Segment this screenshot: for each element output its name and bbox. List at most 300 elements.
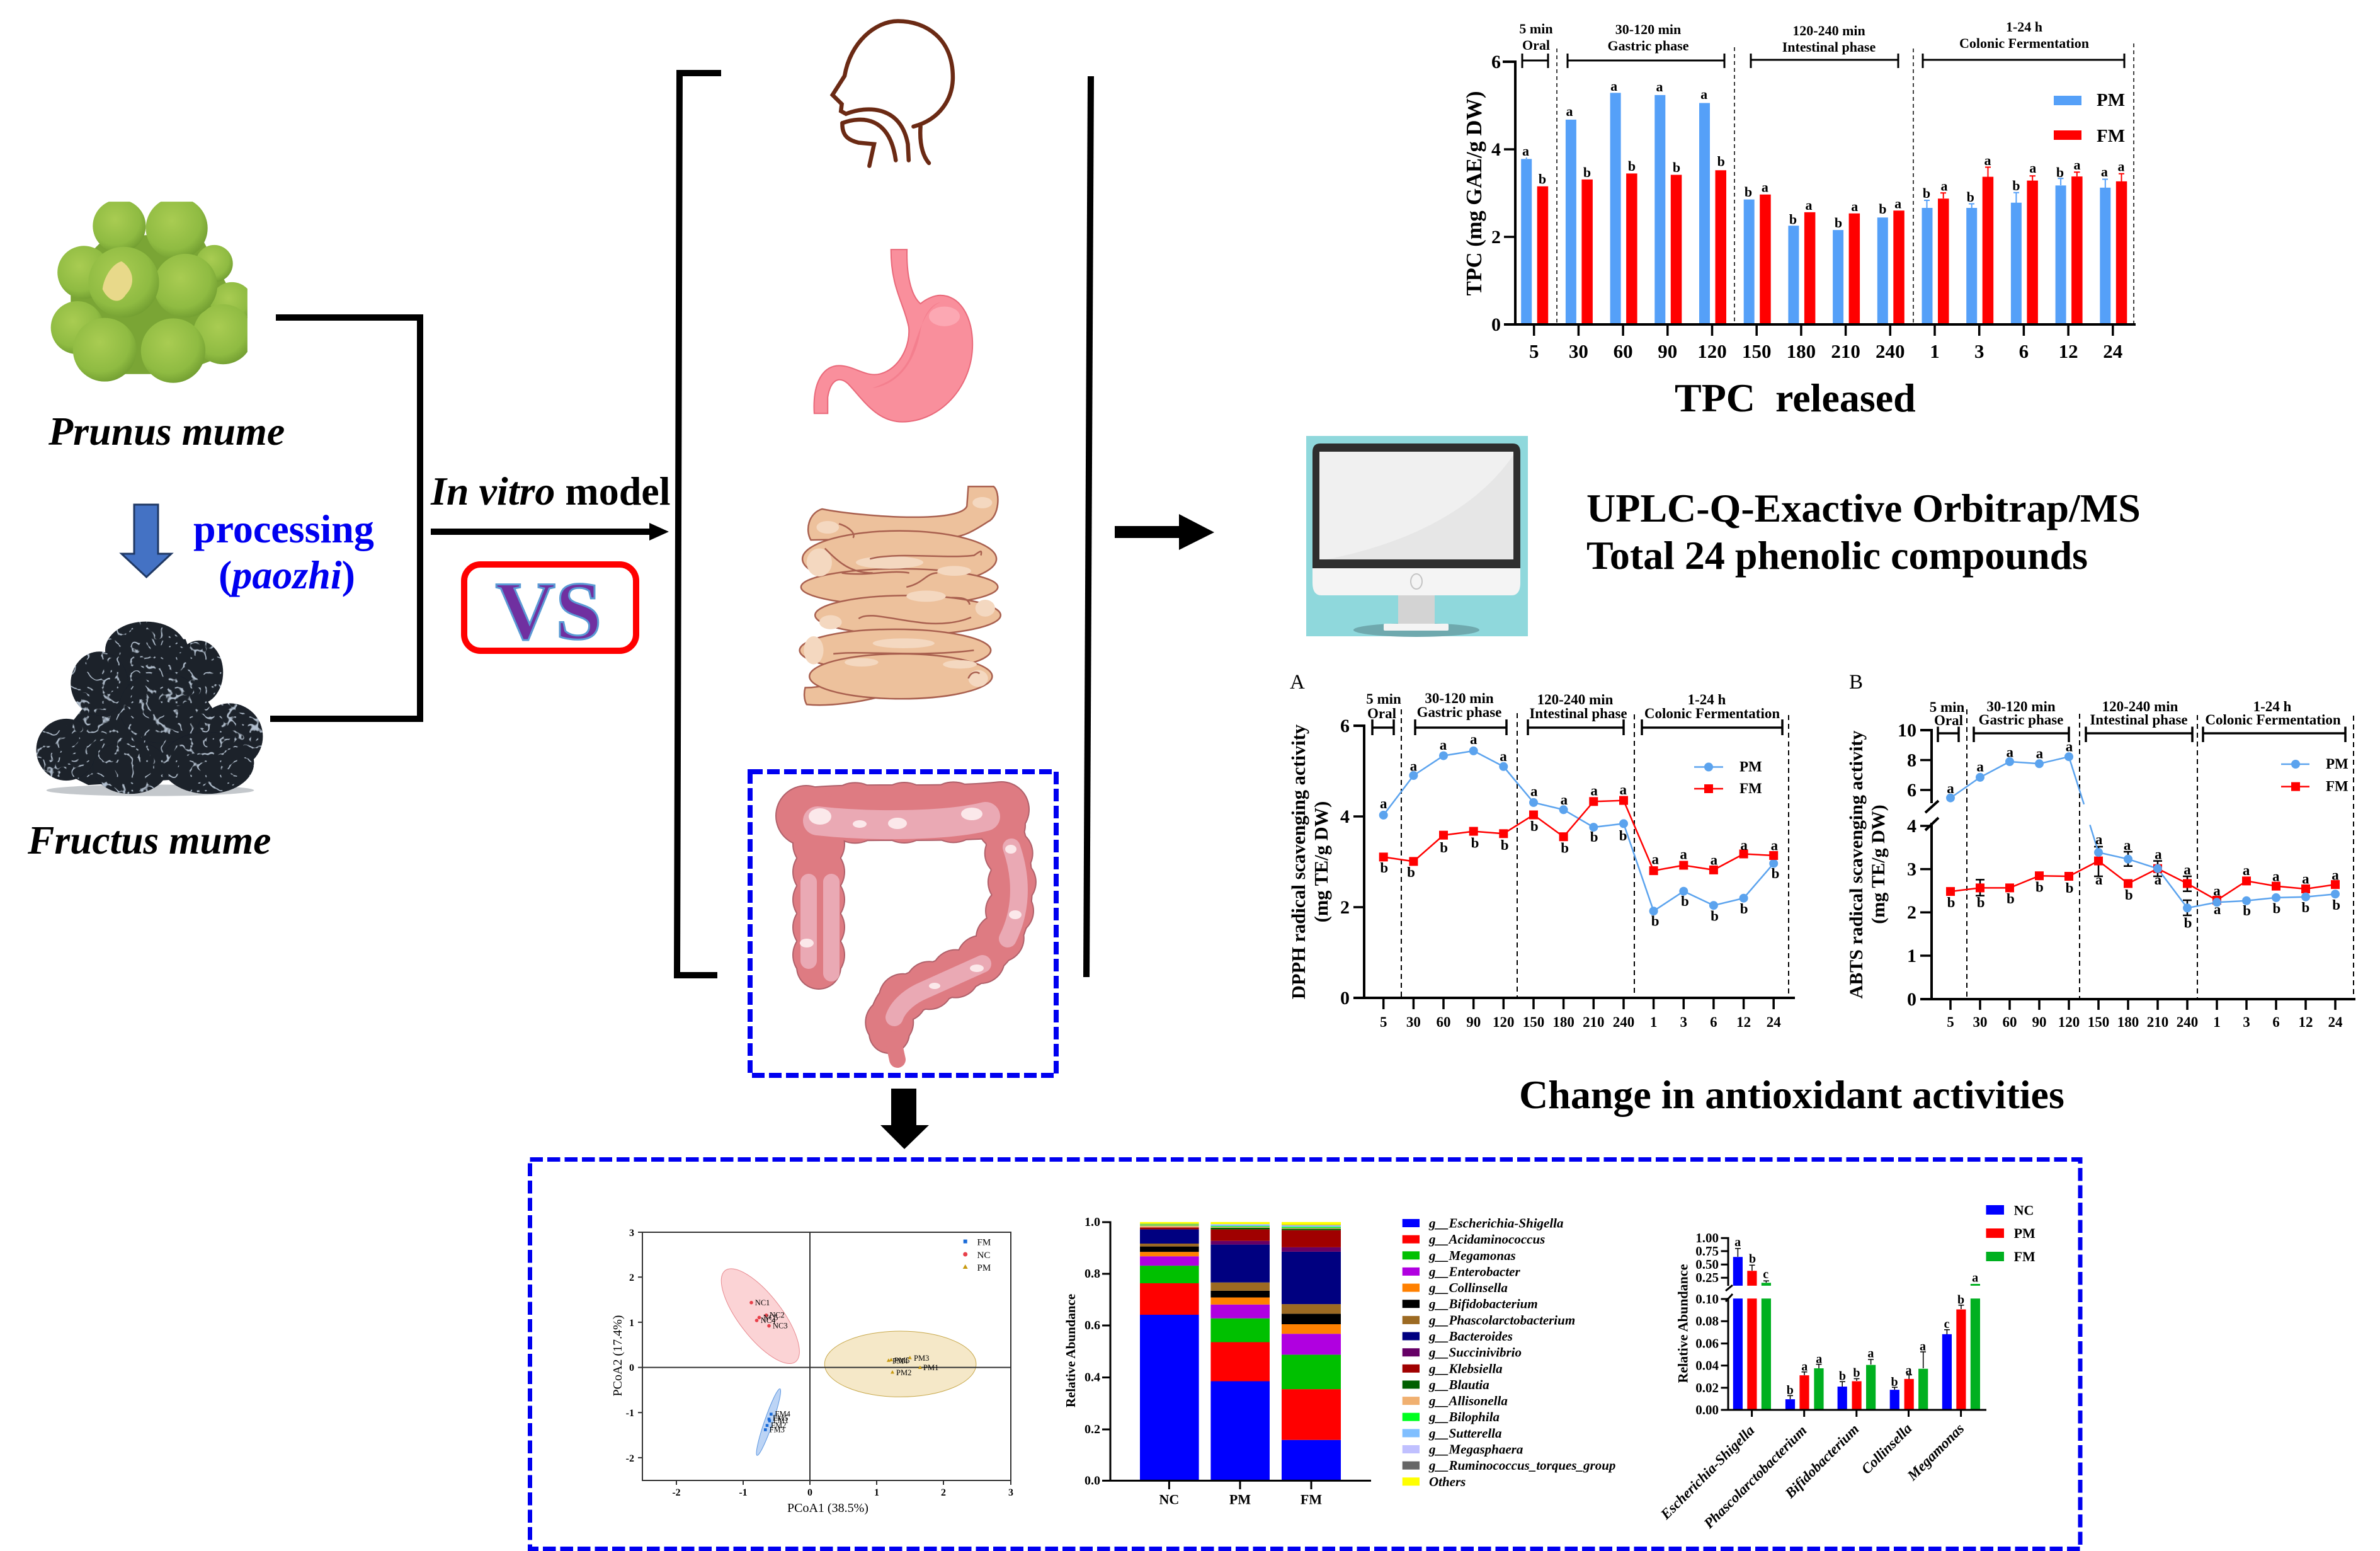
significance letters: b — [1772, 866, 1779, 881]
significance letters: a — [1500, 748, 1507, 764]
significance letters: a — [1619, 782, 1627, 798]
phase dividers — [1401, 709, 1789, 998]
points: FM: FM3 — [770, 1425, 785, 1434]
phase dividers — [1557, 43, 2134, 324]
x axis numbers: 1 — [1930, 340, 1940, 362]
significance letters: a — [1984, 152, 1991, 168]
significance letters: b — [1749, 1252, 1756, 1266]
y axis numbers — [1898, 720, 1916, 1010]
x axis numbers: 90 — [1466, 1014, 1481, 1030]
x axis numbers: 210 — [1831, 340, 1860, 362]
y axis numbers: 1.0 — [1085, 1215, 1100, 1229]
significance letters: a — [1410, 758, 1418, 774]
legend — [2054, 90, 2125, 146]
ellipse: NC group — [709, 1257, 812, 1375]
plot frame and axes — [638, 1232, 1011, 1485]
phase titles: Intestinal phase — [1782, 39, 1876, 55]
legend: PM — [1739, 758, 1762, 775]
icon: large intestine — [800, 808, 1022, 1060]
significance letters: b — [2007, 891, 2015, 907]
significance letters: b — [1745, 184, 1752, 200]
y axis numbers: 1.00 — [1695, 1230, 1719, 1245]
label: Prunus mume: Prunus mume — [48, 409, 285, 454]
points: NC: NC1 — [755, 1298, 770, 1307]
x axis numbers: 5 — [1380, 1014, 1387, 1030]
y axis numbers: 0.10 — [1695, 1291, 1719, 1307]
significance letters: a — [2272, 868, 2280, 884]
phase titles: 5 min — [1366, 691, 1401, 707]
phase brackets — [1522, 54, 2124, 68]
significance letters: a — [1566, 103, 1573, 119]
y axis numbers: 0 — [629, 1363, 634, 1373]
significance letters: a — [1700, 86, 1707, 102]
y axis numbers: 0.50 — [1695, 1257, 1719, 1272]
phase dividers — [1967, 709, 2354, 999]
legend — [2281, 756, 2349, 794]
rotated genus labels: Phascolarctobacterium — [1700, 1422, 1810, 1532]
points: PM — [887, 1354, 938, 1377]
significance letters: b — [1947, 895, 1955, 910]
x axis group names: NC — [1159, 1492, 1179, 1507]
y axis numbers: 0.75 — [1695, 1244, 1719, 1259]
significance letters: b — [1967, 189, 1974, 205]
significance letters: a — [1941, 178, 1947, 193]
chart: A DPPH line chart — [1288, 671, 1795, 1030]
x axis numbers: 6 — [2272, 1014, 2280, 1030]
legend: genera: g__Bilophila — [1428, 1409, 1500, 1424]
points: PM: PM4 — [892, 1357, 908, 1366]
y axis title: Relative Abundance — [1675, 1264, 1691, 1383]
significance letters: b — [2056, 164, 2064, 180]
significance letters: b — [1471, 835, 1479, 850]
points: FM: FM2 — [771, 1421, 786, 1430]
x axis numbers: 5 — [1947, 1014, 1954, 1030]
bars: FM — [1762, 1283, 1980, 1410]
phase titles: 120-240 min — [2102, 699, 2178, 714]
points: NC — [749, 1298, 788, 1331]
phase titles — [1930, 699, 2341, 728]
y axis numbers: 0.00 — [1695, 1402, 1719, 1417]
legend — [1694, 758, 1762, 796]
y axis numbers: 2 — [629, 1273, 634, 1283]
y axis numbers: 10 — [1898, 720, 1916, 741]
y axis title: PCoA2 (17.4%) — [611, 1315, 625, 1396]
significance letters: b — [2302, 900, 2309, 915]
legend: NC — [977, 1251, 990, 1261]
significance letters: b — [1590, 829, 1598, 845]
x axis numbers: 60 — [1614, 340, 1633, 362]
arrow: to results — [1115, 514, 1214, 550]
line: FM series — [1946, 857, 2340, 905]
significance letters: a — [2117, 159, 2125, 174]
chart: differential genera grouped bars — [1657, 1203, 2036, 1532]
legend: genera: g__Sutterella — [1428, 1426, 1502, 1441]
significance letters: b — [1380, 860, 1388, 876]
phase titles — [1519, 19, 2089, 55]
x axis numbers: 24 — [2103, 340, 2122, 362]
y axis title: TPC (mg GAE/g DW) — [1462, 91, 1486, 295]
phase titles: 1-24 h — [2006, 19, 2042, 35]
x axis numbers: 30 — [1973, 1014, 1988, 1030]
y axis numbers: 8 — [1907, 750, 1916, 771]
phase brackets — [1938, 727, 2345, 742]
label: Fructus mume: Fructus mume — [27, 818, 271, 862]
phase titles: Intestinal phase — [2090, 712, 2188, 728]
significance letters: b — [1530, 818, 1539, 834]
points: PM: PM1 — [923, 1363, 938, 1372]
significance letters: a — [2101, 164, 2108, 180]
callout box: colonic fermentation highlight — [750, 772, 1056, 1075]
x axis numbers: 2 — [941, 1487, 946, 1498]
y axis numbers — [1340, 716, 1350, 1009]
x axis numbers: 6 — [1710, 1014, 1717, 1030]
y axis numbers: 0.4 — [1085, 1371, 1100, 1385]
bars: PM series — [1521, 93, 2110, 324]
icon: stomach — [814, 249, 972, 422]
x axis numbers: 60 — [1436, 1014, 1451, 1030]
legend: FM — [977, 1237, 991, 1247]
points: PM: PM5 — [894, 1356, 909, 1365]
significance letters: a — [1440, 737, 1447, 753]
significance letters: b — [1787, 1383, 1794, 1397]
y axis numbers: 0.06 — [1695, 1336, 1719, 1351]
phase titles: Gastric phase — [1979, 712, 2063, 728]
points: NC: NC2 — [770, 1311, 785, 1320]
points: NC: NC4 — [761, 1316, 776, 1325]
y axis numbers: 1 — [629, 1318, 634, 1329]
legend: genera: g__Allisonella — [1428, 1394, 1508, 1409]
x axis numbers: 3 — [1974, 340, 1984, 362]
axes with break — [1721, 1238, 1986, 1410]
legend: genera: g__Phascolarctobacterium — [1428, 1312, 1575, 1327]
significance letters: a — [1530, 784, 1538, 799]
y axis title: DPPH radical scavenging activity — [1288, 724, 1309, 999]
phase titles: Colonic Fermentation — [1959, 35, 2089, 51]
points: FM — [764, 1410, 791, 1434]
icon: green Prunus mume fruit pile — [51, 197, 253, 383]
icon: black Fructus mume fruit pile — [37, 622, 263, 796]
significance letters: b — [2036, 879, 2044, 895]
y axis numbers: 6 — [1907, 780, 1916, 801]
x axis group names — [1159, 1492, 1322, 1507]
y axis title: ABTS radical scavenging activity — [1846, 731, 1867, 999]
significance letters: a — [1894, 195, 1901, 211]
chart: B ABTS line chart — [1846, 671, 2355, 1030]
significance letters: a — [1590, 782, 1598, 799]
significance letters: a — [1920, 1340, 1926, 1354]
x axis numbers: 120 — [2058, 1014, 2080, 1030]
phase titles: 30-120 min — [1615, 21, 1681, 37]
significance letters: b — [2125, 887, 2133, 903]
phase titles: Oral — [1367, 706, 1396, 721]
significance letters: b — [1673, 159, 1680, 175]
phase titles: Oral — [1934, 713, 1963, 728]
significance letters — [1947, 738, 2340, 931]
significance letters: b — [1561, 840, 1569, 856]
y axis numbers: 0.2 — [1085, 1422, 1100, 1436]
y axis numbers — [1695, 1230, 1719, 1417]
outer dark edge with haustra bumps — [806, 810, 1012, 1033]
panel: gut microbiota dashed box — [530, 1159, 2080, 1548]
legend: NC — [2014, 1203, 2034, 1218]
legend — [1986, 1203, 2036, 1264]
significance letters: a — [1470, 731, 1478, 747]
legend: FM — [2097, 126, 2125, 146]
significance letters: b — [2273, 900, 2280, 916]
significance letters: a — [1680, 847, 1687, 862]
significance letters: a — [1976, 758, 1984, 775]
x axis numbers: 90 — [2032, 1014, 2047, 1030]
y axis numbers: 0.08 — [1695, 1313, 1719, 1329]
highlights — [800, 808, 1022, 989]
phase titles — [1366, 690, 1780, 721]
significance letters: b — [1539, 171, 1546, 186]
phase titles: 30-120 min — [1986, 699, 2056, 714]
phase titles: 5 min — [1930, 699, 1965, 715]
x axis numbers: 210 — [1583, 1014, 1605, 1030]
y axis numbers: 6 — [1491, 52, 1501, 72]
y axis numbers: 2 — [1907, 902, 1916, 923]
significance letters: a — [1610, 78, 1617, 94]
points: PM: PM2 — [896, 1368, 911, 1377]
x axis numbers: 60 — [2003, 1014, 2017, 1030]
ellipse: PM group — [824, 1331, 976, 1397]
text block: analysis method: UPLC-Q-Exactive Orbitrap/MS — [1586, 486, 2141, 530]
significance letters: a — [2332, 867, 2339, 883]
heading: TPC released: TPC released — [1675, 375, 1916, 420]
x axis numbers: 24 — [2328, 1014, 2343, 1030]
points: FM: FM5 — [773, 1414, 788, 1422]
points: PM: PM3 — [914, 1354, 929, 1363]
y axis numbers: 0 — [1340, 988, 1350, 1009]
legend: genera: g__Klebsiella — [1428, 1361, 1503, 1376]
phase titles: Intestinal phase — [1529, 706, 1627, 721]
legend: genera: g__Bacteroides — [1428, 1329, 1513, 1344]
significance letters: a — [1906, 1363, 1912, 1377]
points: NC: NC5 — [763, 1313, 778, 1322]
significance letters: b — [2066, 880, 2073, 896]
x axis numbers: 180 — [1552, 1014, 1574, 1030]
y axis numbers — [1085, 1215, 1100, 1488]
chart: stacked relative abundance bars — [1063, 1215, 1615, 1507]
significance letters: c — [1763, 1268, 1768, 1281]
legend: FM — [2326, 779, 2349, 794]
arrow: to digestion model — [431, 523, 669, 541]
significance letters: a — [2095, 872, 2103, 888]
line: FM series — [1379, 796, 1778, 875]
significance letters: a — [2095, 832, 2103, 847]
bracket: joins both materials — [270, 314, 420, 722]
x axis numbers: 0 — [807, 1487, 812, 1498]
axis titles: PCoA1 (38.5%) — [787, 1501, 868, 1515]
y axis numbers: 3 — [1907, 859, 1916, 880]
significance letters: a — [2214, 901, 2221, 917]
phase titles: Gastric phase — [1417, 704, 1501, 720]
label: processing paozhi: (paozhi) — [219, 552, 355, 597]
legend: genera: g__Acidaminococcus — [1428, 1232, 1545, 1247]
icon: small intestine — [800, 486, 1001, 705]
significance letters: a — [2243, 862, 2250, 878]
legend: genera: g__Blautia — [1428, 1377, 1489, 1392]
x axis numbers: 180 — [2117, 1014, 2139, 1030]
phase titles: Colonic Fermentation — [2205, 712, 2341, 728]
phase titles: 120-240 min — [1792, 23, 1865, 38]
x axis numbers: 120 — [1697, 340, 1727, 362]
significance letters: b — [1651, 913, 1660, 929]
significance letters: a — [2073, 157, 2081, 173]
significance letters: a — [1651, 852, 1659, 867]
legend: genera: g__Enterobacter — [1428, 1264, 1520, 1279]
significance letters: a — [2302, 871, 2309, 887]
x axis numbers: 150 — [2088, 1014, 2109, 1030]
x axis numbers — [1529, 340, 2122, 362]
bracket: digestive tract left — [677, 73, 721, 975]
legend: PM — [2014, 1225, 2036, 1241]
significance letters: a — [1801, 1359, 1808, 1373]
legend: PM — [2097, 90, 2125, 110]
legend: FM — [1739, 781, 1762, 796]
x axis numbers: 1 — [1650, 1014, 1657, 1030]
axes — [1353, 726, 1795, 998]
x axis numbers: 180 — [1787, 340, 1816, 362]
significance letters: a — [2155, 872, 2162, 888]
significance letters: b — [1501, 837, 1509, 853]
significance letters — [1380, 731, 1779, 929]
y axis numbers: 0.8 — [1085, 1267, 1100, 1281]
rotated genus labels: Collinsella — [1859, 1421, 1915, 1477]
x axis numbers: 240 — [2177, 1014, 2198, 1030]
phase titles: 1-24 h — [1688, 692, 1726, 707]
x axis numbers — [1947, 1014, 2343, 1030]
significance letters: a — [1734, 1235, 1741, 1249]
x axis numbers — [1380, 1014, 1781, 1030]
inner pink lumen — [809, 816, 1019, 1017]
x axis numbers: 24 — [1767, 1014, 1781, 1030]
legend: genera: g__Bifidobacterium — [1428, 1296, 1538, 1312]
significance letters: a — [1805, 197, 1813, 213]
bar: PM — [1210, 1222, 1270, 1480]
significance letters: a — [1771, 837, 1779, 853]
x axis numbers: 3 — [1680, 1014, 1687, 1030]
text block: analysis method — [1586, 486, 2141, 578]
x axis numbers: 30 — [1569, 340, 1588, 362]
x axis numbers: 5 — [1529, 340, 1539, 362]
legend: genera: g__Megasphaera — [1428, 1441, 1523, 1457]
significance letters: b — [1628, 158, 1636, 174]
y axis numbers: 0.6 — [1085, 1319, 1100, 1332]
icon: computer monitor — [1306, 436, 1528, 637]
x axis numbers: 1 — [874, 1487, 879, 1498]
y axis numbers: 0.0 — [1085, 1474, 1100, 1488]
y axis numbers — [1491, 52, 1501, 335]
x axis numbers: 3 — [1008, 1487, 1013, 1498]
significance letters: b — [1583, 164, 1591, 180]
significance letters: b — [1711, 908, 1719, 924]
significance letters: a — [2184, 862, 2191, 878]
x axis numbers: 120 — [1493, 1014, 1515, 1030]
significance letters: a — [2029, 160, 2036, 176]
legend: genera: g__Succinivibrio — [1428, 1345, 1522, 1360]
significance letters: b — [1440, 840, 1448, 856]
chart: PCoA scatter — [611, 1228, 1013, 1515]
significance letters: a — [1972, 1271, 1978, 1285]
x axis numbers: 3 — [2243, 1014, 2250, 1030]
significance letters: a — [2007, 745, 2014, 760]
chart: TPC released bars — [1462, 19, 2136, 362]
significance letters: b — [1853, 1366, 1860, 1380]
significance letters: b — [1407, 864, 1415, 880]
line: PM series — [1379, 747, 1778, 915]
phase titles: 1-24 h — [2253, 699, 2292, 714]
phase titles: 120-240 min — [1537, 692, 1614, 707]
x axis group names: PM — [1229, 1492, 1251, 1507]
legend: genera: g__Ruminococcus_torques_group — [1428, 1458, 1615, 1473]
significance letters: a — [1867, 1347, 1874, 1361]
y axis numbers: 3 — [629, 1228, 634, 1239]
legend: PM — [977, 1263, 991, 1273]
rotated genus labels: Escherichia-Shigella — [1657, 1422, 1758, 1523]
significance letters: a — [2036, 745, 2044, 761]
points: NC: NC3 — [773, 1322, 788, 1331]
label: processing paozhi: processing — [193, 507, 374, 551]
phase titles: Oral — [1522, 37, 1550, 53]
significance letters: c — [1944, 1317, 1950, 1331]
legend — [963, 1237, 991, 1273]
significance letters: a — [2066, 738, 2073, 754]
significance letters — [1522, 78, 2125, 231]
significance letters: a — [2155, 847, 2162, 862]
significance letters: b — [1977, 895, 1985, 910]
x axis numbers: -2 — [672, 1487, 681, 1498]
y axis numbers: 0.04 — [1695, 1358, 1719, 1373]
significance letters: a — [1762, 179, 1768, 195]
divider bracket: digestive tract right — [1086, 76, 1091, 977]
y axis title — [1288, 724, 1332, 999]
axes — [1503, 62, 2136, 324]
axes with break — [1920, 730, 2355, 999]
significance letters: a — [2124, 837, 2131, 853]
x axis numbers: 150 — [1523, 1014, 1544, 1030]
x axis numbers: 12 — [2299, 1014, 2313, 1030]
significance letters: a — [1561, 792, 1568, 808]
bars: NC — [1733, 1257, 1952, 1410]
axes — [1102, 1222, 1371, 1489]
label: processing paozhi — [193, 507, 374, 597]
legend: genera: g__Escherichia-Shigella — [1428, 1216, 1564, 1231]
panel letter A: A — [1290, 671, 1305, 694]
y axis numbers: 0.25 — [1695, 1270, 1719, 1285]
y axis numbers: 1 — [1907, 946, 1916, 966]
x axis group names: FM — [1301, 1492, 1322, 1507]
line: PM series — [1946, 752, 2335, 908]
label: In vitro model: In vitro model — [430, 469, 670, 513]
significance letters: a — [1656, 79, 1663, 94]
y axis numbers: 0 — [1907, 989, 1916, 1010]
arrow: down to microbiota — [880, 1089, 929, 1149]
significance letters — [1734, 1235, 1978, 1397]
significance letters: b — [1957, 1293, 1964, 1307]
significance letters: b — [1891, 1375, 1898, 1389]
icon: head and oral cavity — [833, 21, 953, 166]
significance letters: b — [1789, 212, 1797, 227]
y axis numbers: 0.02 — [1695, 1380, 1719, 1395]
rotated genus labels — [1657, 1421, 1967, 1532]
y axis numbers: 0 — [1491, 314, 1501, 335]
x axis numbers: 12 — [2059, 340, 2078, 362]
y axis title: Relative Abundance — [1063, 1294, 1078, 1407]
bars: PM — [1747, 1271, 1966, 1410]
phase titles: 5 min — [1519, 21, 1553, 37]
